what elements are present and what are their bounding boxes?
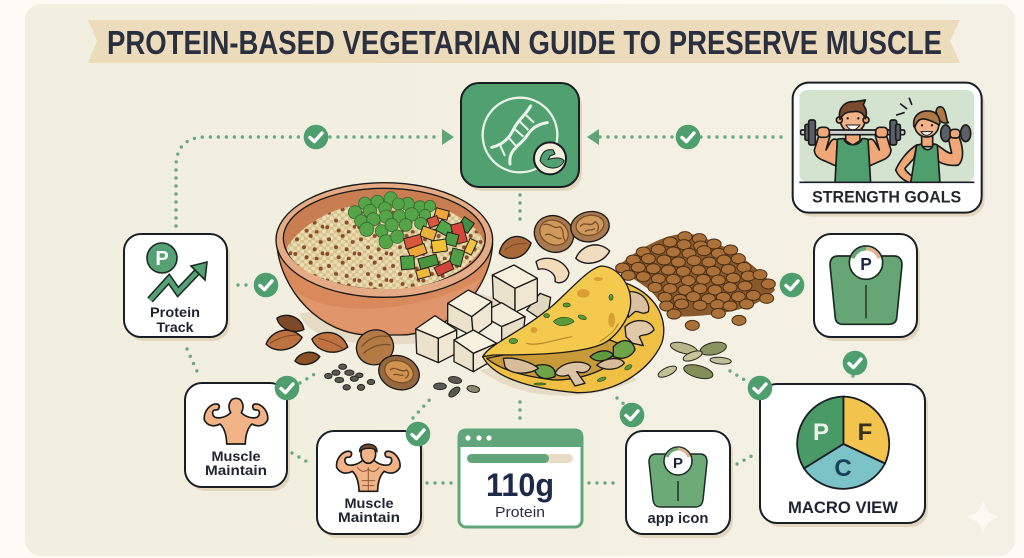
- label: muscle maintain: Maintain: [338, 509, 400, 525]
- card: protein track: [124, 234, 230, 341]
- label: macro view: MACRO VIEW: [788, 499, 898, 517]
- bowl: [276, 183, 493, 335]
- card: strength goals: [793, 83, 985, 217]
- icon: bicep badge: [534, 142, 566, 174]
- label: muscle maintain: Muscle: [212, 448, 261, 464]
- check badges: [254, 125, 867, 446]
- icon: P badge: P: [155, 248, 169, 270]
- card: muscle maintain 1: [185, 383, 290, 491]
- icon: flexing silhouette: [204, 398, 268, 444]
- arrow: into centre card from right: [587, 129, 599, 145]
- peas: [348, 192, 436, 249]
- icon: scale: P: [860, 254, 872, 274]
- card: macro view: [760, 384, 928, 527]
- pumpkin seeds: [657, 340, 732, 381]
- label: muscle maintain: [205, 448, 267, 478]
- arrow: into centre card from left: [442, 129, 454, 145]
- card: app icon: [626, 431, 733, 538]
- title banner: [88, 20, 960, 63]
- label: muscle maintain: Maintain: [205, 462, 267, 478]
- icon: small scale: P: [673, 455, 683, 472]
- pie chart: P F C: C: [834, 455, 852, 482]
- illustration: athletes: [801, 98, 971, 183]
- nuts lower left: [352, 325, 424, 395]
- progress bar: [467, 454, 573, 463]
- label: muscle maintain: Muscle: [344, 495, 394, 511]
- pie chart: P F C: [797, 396, 889, 489]
- lentil pile: [616, 232, 775, 330]
- label: protein track: Track: [156, 319, 194, 335]
- card: 110g protein window: [458, 429, 583, 527]
- value: 110g: 110g: [486, 467, 554, 503]
- icon: trend arrow: [150, 262, 207, 300]
- label: protein track: [150, 304, 200, 335]
- nuts and almonds: [265, 209, 612, 366]
- label: app icon: app icon: [648, 511, 708, 527]
- sparkle watermark: [966, 499, 1000, 535]
- card: muscle maintain 2: [317, 431, 424, 538]
- icon: DNA in circle: [483, 98, 566, 174]
- icon: flexing man: [337, 444, 400, 491]
- label: protein: Protein: [495, 505, 545, 521]
- pie chart: P F C: F: [858, 419, 872, 446]
- pie chart: P F C: P: [813, 419, 829, 446]
- card: scale: [814, 234, 920, 341]
- seeds: [325, 364, 480, 399]
- food illustration: [265, 183, 775, 399]
- label: muscle maintain: [338, 495, 400, 525]
- tofu cubes: [416, 265, 551, 372]
- label: protein track: Protein: [150, 304, 200, 320]
- food shadows: [299, 290, 637, 396]
- omelette with mushrooms: [483, 266, 664, 393]
- label: strength goals: STRENGTH GOALS: [812, 189, 961, 207]
- dotted connectors: [176, 137, 853, 483]
- chopped vegetables: [400, 208, 477, 279]
- card: DNA muscle: [461, 83, 582, 191]
